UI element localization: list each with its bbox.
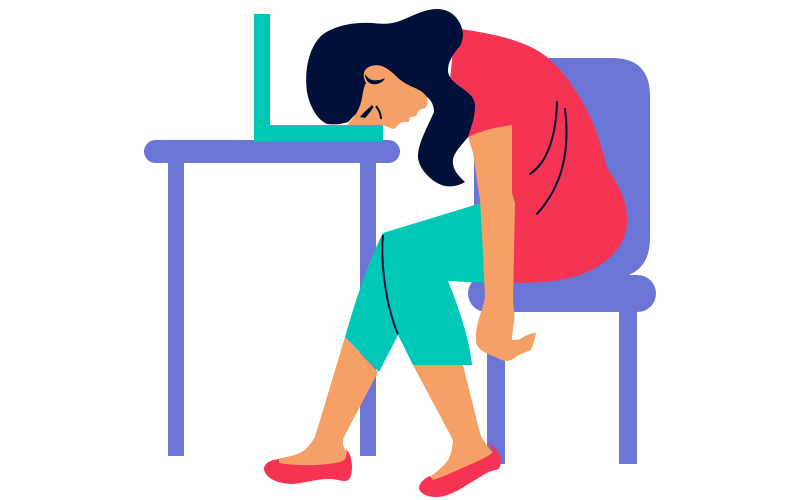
closed eye bbox=[360, 105, 374, 118]
left leg bbox=[278, 337, 378, 467]
laptop bbox=[254, 14, 383, 142]
shorts bbox=[345, 202, 486, 372]
arm and hand bbox=[468, 125, 536, 361]
back crease lines bbox=[530, 102, 567, 214]
face bbox=[348, 65, 427, 129]
eyelash bbox=[376, 106, 381, 119]
shorts seam bbox=[382, 235, 398, 334]
right leg bbox=[413, 365, 495, 484]
left shoe bbox=[264, 449, 352, 484]
hair bbox=[306, 9, 475, 186]
right shoe bbox=[419, 442, 501, 497]
desk bbox=[144, 140, 400, 456]
chair bbox=[468, 58, 656, 464]
ear line bbox=[365, 74, 385, 84]
shirt bbox=[450, 28, 627, 283]
